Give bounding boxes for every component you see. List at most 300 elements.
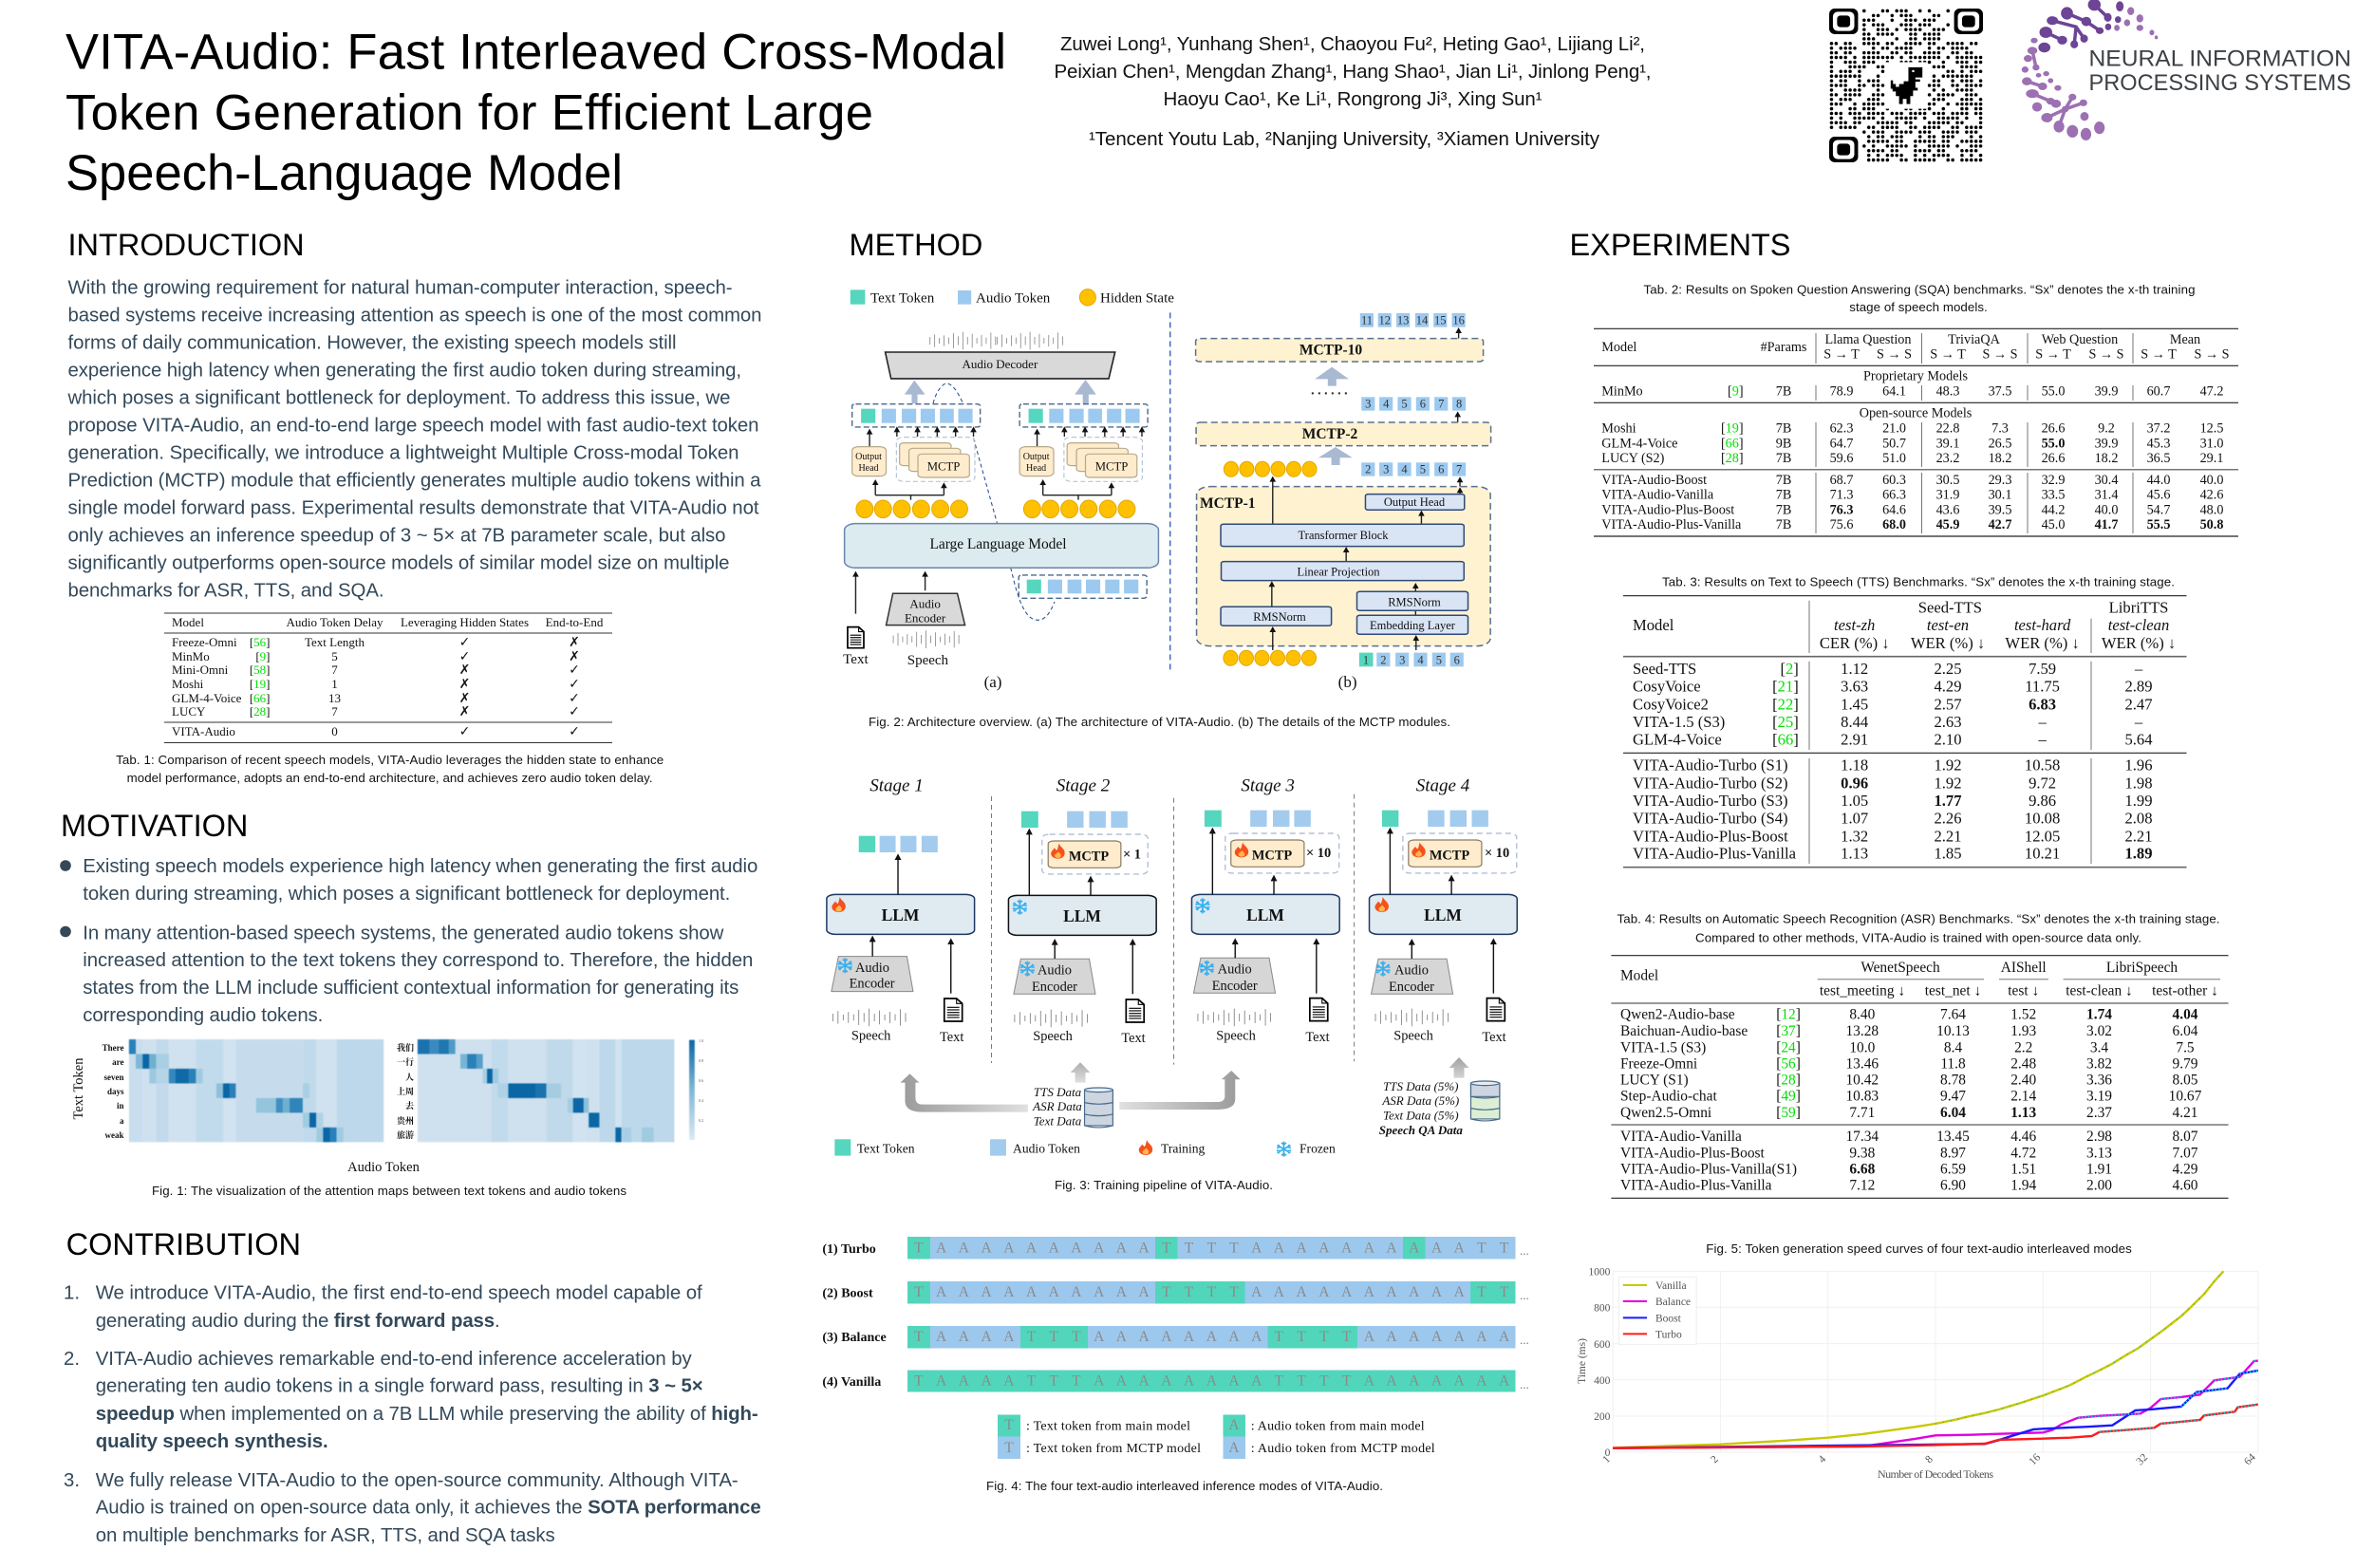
- table 1: speech model comparison: ✓: [459, 649, 470, 664]
- list: contributions: 3.: [64, 1470, 80, 1491]
- figure 3 labels: LLM: [1424, 905, 1462, 924]
- text block: introduction: which poses a significant bottleneck for deployment. To address this issue, we: [66, 387, 731, 408]
- table 1: speech model comparison: 13: [328, 691, 341, 705]
- table 2: SQA results: 31.0: [2200, 436, 2223, 451]
- chart labels: [1577, 1266, 2258, 1481]
- table 2: SQA results: S → T: [2035, 347, 2071, 363]
- table 3: TTS results: 0.96: [1841, 774, 1868, 792]
- table 2: SQA results: 36.5: [2147, 451, 2170, 466]
- table 3: TTS results: 2.21: [2124, 827, 2153, 845]
- caption: figure 5: Fig. 5: Token generation speed curves of four text-audio interleaved modes: [1706, 1241, 2132, 1256]
- table 2: SQA results: VITA-Audio-Plus-Boost: [1601, 502, 1734, 517]
- table 2: SQA results: 31.4: [2095, 488, 2118, 503]
- figure 2 labels: RMSNorm: [1253, 610, 1306, 624]
- table 4: ASR results: 1.91: [2086, 1162, 2112, 1178]
- table 2: SQA results: 62.3: [1830, 420, 1853, 436]
- table 2: SQA results: 30.4: [2095, 473, 2118, 488]
- figure 2 labels: Text: [843, 652, 869, 667]
- table 1: speech model comparison: [66]: [250, 691, 270, 705]
- table 2: SQA results: [28]: [1721, 451, 1744, 466]
- table 4: ASR results: 2.00: [2086, 1178, 2112, 1194]
- table 4: ASR results: 11.8: [1940, 1055, 1966, 1072]
- table 3: TTS results: 1.96: [2124, 756, 2153, 775]
- table 3: TTS results: 1.07: [1841, 810, 1868, 828]
- figure 3 labels: Audio: [855, 961, 889, 976]
- table 4: ASR results: 2.48: [2010, 1055, 2036, 1072]
- figure 2 labels: 15: [1434, 313, 1447, 327]
- text block: introduction: forms of daily communication. However, the existing speech models still: [68, 332, 676, 353]
- table 3: TTS results: CER (%) ↓: [1820, 634, 1890, 652]
- table 1: speech model comparison: MinMo: [172, 649, 210, 663]
- table 3: TTS results: 10.08: [2025, 810, 2060, 828]
- text block: introduction: benchmarks for ASR, TTS, and SQA.: [68, 580, 383, 601]
- table 1: speech model comparison: Model: [172, 615, 204, 629]
- table 3: TTS results: 1.92: [1934, 774, 1962, 792]
- chart: attention heatmaps: are: [112, 1057, 124, 1067]
- figure 3 labels: Audio: [1218, 962, 1252, 978]
- chart: attention heatmaps: There: [103, 1043, 123, 1053]
- authors and affiliations: Peixian Chen¹, Mengdan Zhang¹, Hang Shao¹, Jian Li¹, Jinlong Peng¹,: [1054, 61, 1652, 83]
- list: motivation bullets: token during streaming, which poses a significant bottleneck for deployment.: [83, 884, 730, 905]
- table 3: TTS results: 9.72: [2029, 774, 2056, 792]
- caption: table 2: stage of speech models.: [1849, 300, 1988, 314]
- table 4: ASR results: 2.98: [2086, 1129, 2112, 1145]
- table 4: ASR results: [37]: [1776, 1023, 1801, 1039]
- table 4: ASR results: 8.07: [2173, 1129, 2198, 1145]
- table 3: TTS results: test-zh: [1834, 616, 1875, 634]
- table 4: ASR results: 7.5: [2176, 1039, 2195, 1055]
- table 2: SQA results: 7B: [1776, 384, 1791, 400]
- table 3: TTS results: 1.77: [1934, 792, 1962, 810]
- table 1: speech model comparison: 0: [331, 724, 338, 738]
- figure 5: token generation speed chart: [1577, 1241, 2258, 1481]
- table 3: TTS results: Seed-TTS: [1633, 660, 1696, 678]
- table 2: SQA results: 23.2: [1936, 451, 1959, 466]
- table 2: SQA results: GLM-4-Voice: [1601, 436, 1677, 451]
- authors and affiliations: Zuwei Long¹, Yunhang Shen¹, Chaoyou Fu², Heting Gao¹, Lijiang Li²,: [1060, 33, 1645, 55]
- data cylinders: [1085, 1081, 1500, 1128]
- table 4: ASR results: 1.74: [2086, 1007, 2112, 1023]
- table 4: ASR results: 13.45: [1936, 1129, 1970, 1145]
- chart: attention heatmaps: a: [120, 1116, 124, 1126]
- table 2: SQA results: 26.6: [2042, 420, 2065, 436]
- table 2: SQA results: 22.8: [1936, 420, 1959, 436]
- table 3: TTS results: 6.83: [2029, 695, 2056, 713]
- left heatmap bands: [129, 1039, 383, 1142]
- table 4: ASR results: 10.13: [1936, 1023, 1970, 1039]
- table 2: SQA results: 32.9: [2042, 473, 2065, 488]
- table 2: SQA results: 45.6: [2147, 488, 2170, 503]
- table 2: SQA results: [9]: [1728, 384, 1744, 400]
- table 3: TTS results: VITA-Audio-Plus-Boost: [1633, 827, 1788, 845]
- figure 2 labels: 2: [1365, 463, 1371, 476]
- table 4: ASR results: [12]: [1776, 1007, 1801, 1023]
- line chart plot: [1613, 1271, 2258, 1452]
- figure 3 labels: × 1: [1123, 848, 1141, 863]
- table 2: SQA results: 64.7: [1830, 436, 1853, 451]
- table 2: SQA results: 66.3: [1882, 488, 1906, 503]
- table 2: SQA results: 18.2: [2095, 451, 2118, 466]
- table 3: TTS results: VITA-Audio-Turbo (S1): [1633, 756, 1788, 775]
- table 4: ASR results: test_meeting ↓: [1820, 983, 1905, 999]
- chart: attention heatmaps: 上周: [397, 1086, 414, 1096]
- figure 2 labels: 8: [1456, 398, 1462, 411]
- chart: attention heatmaps: 人: [405, 1073, 414, 1082]
- figure 3 labels: [850, 775, 1509, 1155]
- table 2: SQA results: 39.1: [1936, 436, 1959, 451]
- figure 2 labels: Audio: [909, 597, 941, 611]
- figure 4 labels: A: [1228, 1417, 1240, 1433]
- text block: introduction: propose VITA-Audio, an end-to-end large speech model with fast audio-text token: [68, 416, 759, 437]
- table 2: SQA results: 12.5: [2200, 420, 2223, 436]
- table 3: TTS results: 2.91: [1841, 731, 1868, 749]
- caption: figure 2: Fig. 2: Architecture overview. (a) The architecture of VITA-Audio. (b) The details of the MCTP modules.: [869, 715, 1450, 729]
- figure 4 labels: : Text token from MCTP model: [1026, 1442, 1201, 1456]
- table 4: ASR results: 6.59: [1940, 1162, 1966, 1178]
- table 3: TTS results: 8.44: [1841, 713, 1869, 731]
- table 4: ASR results: [1611, 912, 2229, 1198]
- figure 2 labels: 4: [1401, 463, 1408, 476]
- figure 2 labels: 6: [1420, 398, 1426, 411]
- figure 3 labels: LLM: [882, 905, 920, 924]
- table 1: speech model comparison: ✓: [569, 704, 580, 719]
- figure 2 labels: MCTP-1: [1200, 495, 1256, 512]
- table 2: SQA results: 30.1: [1989, 488, 2011, 503]
- caption: table 2: Tab. 2: Results on Spoken Question Answering (SQA) benchmarks. “Sx” denotes the x-th training: [1644, 282, 2195, 296]
- table 1: speech model comparison: 7: [331, 663, 338, 677]
- table 4: ASR results: WenetSpeech: [1860, 960, 1940, 976]
- figure 2 labels: Head: [1026, 463, 1046, 474]
- figure 2 labels: 5: [1420, 463, 1426, 476]
- table 2: SQA results: Model: [1601, 340, 1636, 355]
- figure 3 labels: Speech: [1216, 1029, 1256, 1044]
- figure 2 labels: MCTP-10: [1300, 343, 1362, 359]
- table 2: SQA results: 37.5: [1989, 384, 2011, 400]
- table 3: TTS results: 1.85: [1934, 844, 1962, 862]
- figure 4 labels: ...: [1520, 1288, 1529, 1302]
- chart labels: 1000: [1588, 1266, 1611, 1278]
- legend swatches: [851, 289, 1095, 306]
- table 4: ASR results: 8.40: [1849, 1007, 1876, 1023]
- table 1: speech model comparison: ✓: [459, 724, 470, 739]
- list: contributions: Audio is trained on open-source data only, it achieves the SOTA performance: [96, 1498, 761, 1519]
- table 1: speech model comparison: Leveraging Hidden States: [401, 615, 529, 629]
- table 4: ASR results: test-other ↓: [2152, 983, 2218, 999]
- authors and affiliations: ¹Tencent Youtu Lab, ²Nanjing University, ³Xiamen University: [1089, 128, 1600, 150]
- table 2: SQA results: 48.0: [2200, 502, 2223, 517]
- table 4: ASR results: 10.67: [2169, 1089, 2202, 1105]
- chart labels: 200: [1594, 1411, 1611, 1423]
- chart: attention heatmaps: weak: [104, 1130, 123, 1140]
- figure 3 labels: Audio: [1394, 963, 1429, 979]
- figure 2 labels: Output: [855, 452, 882, 462]
- figure 3 labels: Text Data: [1034, 1114, 1082, 1129]
- table 3: TTS results: 2.63: [1934, 713, 1962, 731]
- table 3: TTS results: test-clean: [2108, 616, 2169, 634]
- table 3: TTS results: 1.89: [2124, 844, 2153, 862]
- table 2: SQA results: 55.0: [2042, 384, 2065, 400]
- table 3: TTS results: VITA-Audio-Turbo (S3): [1633, 792, 1788, 810]
- chart: attention heatmaps: 一行: [397, 1056, 414, 1067]
- table 2: SQA results: 51.0: [1882, 451, 1906, 466]
- table 3: TTS results: [1623, 575, 2187, 868]
- table 4: ASR results: 10.83: [1845, 1089, 1879, 1105]
- figure 2 labels: Large Language Model: [930, 536, 1067, 552]
- table 1: speech model comparison: LUCY: [172, 704, 206, 719]
- table 1: speech model comparison: ✗: [459, 704, 470, 719]
- title: Speech-Language Model: [65, 145, 623, 201]
- table 2: SQA results: 45.0: [2042, 517, 2065, 532]
- table 2: SQA results: Open-source Models: [1860, 405, 1973, 420]
- caption: table 4: [1617, 912, 2219, 945]
- table 2: SQA results: 26.5: [1989, 436, 2011, 451]
- table 4: ASR results: [28]: [1776, 1073, 1801, 1089]
- figure 3 labels: × 10: [1306, 846, 1331, 861]
- figure 2 labels: Text Token: [870, 291, 935, 307]
- figure 2 labels: 4: [1417, 653, 1424, 666]
- chart labels: 8: [1923, 1453, 1935, 1465]
- table 4: ASR results: LibriSpeech: [2106, 960, 2178, 976]
- figure 4 labels: (1) Turbo: [822, 1242, 876, 1257]
- table 4: ASR results: VITA-Audio-Vanilla: [1620, 1129, 1742, 1145]
- table 4: ASR results: AIShell: [2001, 960, 2047, 976]
- table 1: speech model comparison: [164, 613, 612, 742]
- table 2: SQA results: 41.7: [2095, 517, 2118, 532]
- figure 4 labels: TAAAAAAAAAATTTTAAAAAAAAAATT: [914, 1240, 1509, 1256]
- list: contributions: VITA-Audio achieves remarkable end-to-end inference acceleration by: [96, 1349, 692, 1370]
- list: contributions: [64, 1283, 761, 1546]
- table 1: speech model comparison: [56]: [250, 635, 270, 649]
- table 3: TTS results: CosyVoice2: [1633, 695, 1709, 713]
- table 4: ASR results: 8.97: [1940, 1145, 1966, 1161]
- list: motivation bullets: In many attention-based speech systems, the generated audio tokens show: [83, 923, 724, 943]
- chart: attention heatmaps: 0.8: [699, 1058, 703, 1063]
- table 4: ASR results: Step-Audio-chat: [1620, 1089, 1717, 1105]
- heading: experiments: EXPERIMENTS: [1570, 228, 1790, 262]
- figure 4 labels: T: [1004, 1417, 1014, 1433]
- table 4: ASR results: 3.13: [2086, 1145, 2112, 1161]
- table 2: SQA results: 7B: [1776, 517, 1791, 532]
- table 4: ASR results: Qwen2-Audio-base: [1620, 1007, 1735, 1023]
- table 3: TTS results: 2.89: [2124, 678, 2153, 696]
- table 4: ASR results: 4.46: [2010, 1129, 2036, 1145]
- figure 4 labels: T: [1004, 1440, 1014, 1456]
- text block: introduction: significantly outperforms open-source models of similar model size on multiple: [68, 552, 729, 573]
- table 4: ASR results: 2.40: [2010, 1073, 2036, 1089]
- caption: table 2: [1644, 282, 2195, 314]
- table 4: ASR results: 7.07: [2173, 1145, 2198, 1161]
- figure 2 labels: (a): [984, 673, 1001, 691]
- table 3: TTS results: WER (%) ↓: [1911, 634, 1985, 652]
- heading: introduction: INTRODUCTION: [68, 228, 305, 262]
- table 1: speech model comparison: [58]: [250, 663, 270, 677]
- figure 2 labels: 3: [1383, 463, 1389, 476]
- table 2: SQA results: Moshi: [1601, 420, 1636, 436]
- figure 2 labels: Embedding Layer: [1370, 619, 1456, 632]
- caption: table 3: Tab. 3: Results on Text to Speech (TTS) Benchmarks. “Sx” denotes the x-th training stage.: [1662, 575, 2175, 589]
- list: contributions: 2.: [64, 1349, 80, 1370]
- table 2: SQA results: 9.2: [2098, 420, 2115, 436]
- table 1: speech model comparison: [19]: [250, 677, 270, 691]
- table 4: ASR results: 7.12: [1849, 1178, 1875, 1194]
- table 3: TTS results: CosyVoice: [1633, 678, 1701, 696]
- figure 3 shapes: [827, 794, 1517, 1157]
- figure 3 labels: Speech: [1033, 1029, 1073, 1044]
- table 4: ASR results: Model: [1620, 967, 1658, 983]
- figure 2 labels: 1: [1363, 653, 1369, 666]
- table 4: ASR results: 10.0: [1849, 1039, 1876, 1055]
- table 1: speech model comparison: ✗: [459, 677, 470, 692]
- table 3: TTS results: 4.29: [1934, 678, 1962, 696]
- text block: introduction: Prediction (MCTP) module that efficiently generates multiple audio tokens within a: [68, 471, 761, 492]
- table 3: TTS results: 5.64: [2124, 731, 2153, 749]
- figure 3 labels: Stage 2: [1056, 775, 1111, 795]
- caption: table 1: [116, 753, 664, 785]
- table 2: SQA results: [66]: [1721, 436, 1744, 451]
- table 2: SQA results: 42.7: [1989, 517, 2011, 532]
- table 4: ASR results: VITA-Audio-Plus-Vanilla(S1): [1620, 1162, 1797, 1178]
- chart labels: Vanilla: [1655, 1280, 1687, 1292]
- figure 2 labels: [843, 291, 1465, 691]
- figure 2 labels: Linear Projection: [1297, 566, 1380, 579]
- table 1: speech model comparison: 1: [331, 677, 338, 691]
- table 3: TTS results: Seed-TTS: [1918, 598, 1982, 616]
- icon: NeurIPS logo: PROCESSING SYSTEMS: [2088, 70, 2351, 96]
- table 2: SQA results: VITA-Audio-Boost: [1601, 473, 1707, 488]
- figure 2 labels: Audio Decoder: [963, 357, 1038, 371]
- figure 3 labels: Encoder: [1389, 980, 1434, 995]
- chart labels: 600: [1594, 1339, 1611, 1351]
- figure 2 labels: Hidden State: [1100, 291, 1174, 307]
- table 2: SQA results: 40.0: [2200, 473, 2223, 488]
- table 4: ASR results: 9.38: [1849, 1145, 1876, 1161]
- table 2: SQA results: S → S: [1982, 347, 2018, 363]
- table 2: SQA results: S → S: [2194, 347, 2230, 363]
- list: motivation bullets: states from the LLM include sufficient contextual information for generating its: [83, 978, 739, 999]
- chart: attention heatmaps: 1.0: [699, 1038, 703, 1043]
- figure 2 labels: RMSNorm: [1388, 596, 1441, 609]
- table 2: SQA results: 7B: [1776, 451, 1791, 466]
- table 3: TTS results: 10.58: [2025, 756, 2060, 775]
- figure 3 labels: Text: [1121, 1031, 1146, 1046]
- table 3: TTS results: –: [2134, 713, 2143, 731]
- figure 4 labels: ...: [1520, 1377, 1529, 1391]
- table 4: ASR results: 3.36: [2086, 1073, 2112, 1089]
- figure 2 labels: Output: [1023, 452, 1050, 462]
- chart labels: Boost: [1655, 1313, 1682, 1324]
- figure 3 labels: Encoder: [850, 977, 895, 992]
- table 2: SQA results: 37.2: [2147, 420, 2170, 436]
- table 3: TTS results: GLM-4-Voice: [1633, 731, 1722, 749]
- table 2: SQA results: S → S: [1877, 347, 1912, 363]
- table 3: TTS results: WER (%) ↓: [2102, 634, 2176, 652]
- table 3: TTS results: test-en: [1927, 616, 1969, 634]
- table 2: SQA results: 43.6: [1936, 502, 1959, 517]
- figure 3 labels: Speech QA Data: [1379, 1123, 1463, 1137]
- list: motivation bullets: Existing speech models experience high latency when generating the first audio: [83, 856, 757, 877]
- table 3: TTS results: test-hard: [2014, 616, 2071, 634]
- chart: attention heatmaps: days: [107, 1087, 124, 1096]
- chart labels: 64: [2242, 1451, 2258, 1467]
- table 3: TTS results: 1.18: [1841, 756, 1868, 775]
- figure 3: training pipeline: [827, 775, 1517, 1192]
- table 3: TTS results: 1.05: [1841, 792, 1868, 810]
- table 3: TTS results: 12.05: [2025, 827, 2060, 845]
- figure 4: interleaved inference modes: [822, 1237, 1529, 1493]
- table 2: SQA results: 44.2: [2042, 502, 2065, 517]
- figure 2 labels: 13: [1397, 313, 1409, 327]
- chart: attention heatmaps: 0.6: [699, 1078, 703, 1083]
- figure 2 labels: Speech: [907, 653, 949, 668]
- table 2: SQA results: 9B: [1776, 436, 1791, 451]
- list: contributions: on multiple benchmarks for ASR, TTS, and SQA tasks: [96, 1525, 555, 1546]
- table 2: SQA results: Mean: [2170, 332, 2200, 347]
- figure 3 labels: Text: [1482, 1030, 1506, 1045]
- table 2: SQA results: 45.9: [1936, 517, 1959, 532]
- chart: attention heatmaps: seven: [104, 1073, 123, 1082]
- table 1: speech model comparison: ✗: [569, 635, 580, 650]
- text block: introduction: single model forward pass. Experimental results demonstrate that VITA-Audio not: [68, 497, 759, 518]
- table 2: SQA results: S → T: [1823, 347, 1860, 363]
- table 2: SQA results: 7.3: [1991, 420, 2009, 436]
- table 4: ASR results: 2.37: [2086, 1105, 2112, 1121]
- table 4: ASR results: 13.28: [1845, 1023, 1879, 1039]
- table 2: SQA results: VITA-Audio-Plus-Vanilla: [1601, 517, 1742, 532]
- table 2: SQA results: 60.7: [2147, 384, 2170, 400]
- figure 3 labels: Text: [1305, 1030, 1330, 1045]
- figure 2 labels: MCTP: [927, 460, 960, 474]
- table 4: ASR results: 6.04: [1940, 1105, 1966, 1121]
- table 2: SQA results: Llama Question: [1824, 332, 1912, 347]
- table 2: SQA results: [19]: [1721, 420, 1744, 436]
- figure 2 labels: 3: [1365, 398, 1371, 411]
- table 3: TTS results: 1.13: [1841, 844, 1868, 862]
- table 3: TTS results: VITA-1.5 (S3): [1633, 713, 1725, 731]
- table 2: SQA results: S → T: [1930, 347, 1966, 363]
- title: Token Generation for Efficient Large: [65, 85, 873, 141]
- chart: attention heatmaps: 0.4: [699, 1098, 703, 1103]
- table 4: ASR results: Baichuan-Audio-base: [1620, 1023, 1748, 1039]
- figure 3 labels: Stage 1: [869, 775, 924, 795]
- table 1: speech model comparison: ✗: [459, 663, 470, 678]
- figure 2 labels: 16: [1452, 313, 1465, 327]
- figure 2 labels: Head: [858, 463, 879, 474]
- figure 2 labels: 14: [1416, 313, 1429, 327]
- table 2: SQA results: 39.5: [1989, 502, 2011, 517]
- table 4: ASR results: Freeze-Omni: [1620, 1055, 1697, 1072]
- figure 3 labels: Speech: [1393, 1029, 1433, 1044]
- caption: table 1: Tab. 1: Comparison of recent speech models, VITA-Audio leverages the hidden state to enhance: [116, 753, 664, 767]
- text block: introduction: experience high latency when generating the first audio token during streaming,: [68, 360, 741, 381]
- figure 4 labels: (3) Balance: [822, 1331, 887, 1345]
- figure 2 labels: 6: [1438, 463, 1444, 476]
- chart: attention heatmaps: Text Token: [71, 1057, 86, 1119]
- figure 3 labels: ASR Data: [1032, 1099, 1082, 1113]
- figure 3 labels: Encoder: [1032, 980, 1077, 995]
- caption: figure 3: Fig. 3: Training pipeline of VITA-Audio.: [1055, 1178, 1273, 1192]
- chart labels: 1: [1600, 1453, 1613, 1465]
- table 1: speech model comparison: Text Length: [305, 635, 365, 649]
- table 2: SQA results: S → S: [2088, 347, 2124, 363]
- table 2: SQA results: 42.6: [2200, 488, 2223, 503]
- figure 2 labels: 5: [1436, 653, 1442, 666]
- table 4: ASR results: 4.21: [2173, 1105, 2197, 1121]
- table 3: TTS results: 3.63: [1841, 678, 1868, 696]
- table 2: SQA results: 55.5: [2147, 517, 2170, 532]
- figure 3 labels: LLM: [1063, 906, 1101, 925]
- caption: figure 4: Fig. 4: The four text-audio interleaved inference modes of VITA-Audio.: [986, 1479, 1383, 1493]
- table 1: speech model comparison: VITA-Audio: [172, 724, 235, 738]
